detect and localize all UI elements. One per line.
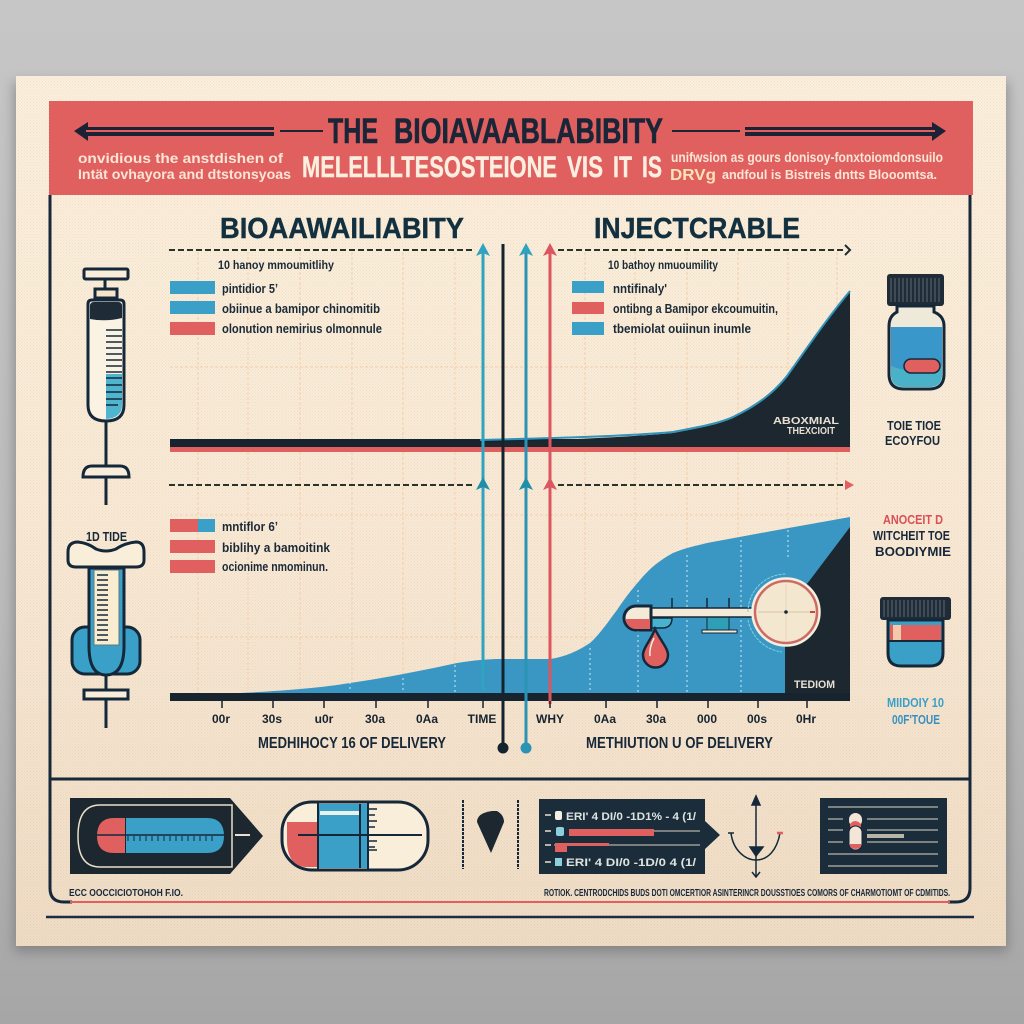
icon: open capsule bbox=[282, 802, 428, 870]
label: 1D TIDE bbox=[86, 529, 127, 544]
chart: upper injectable curve bbox=[170, 291, 850, 452]
axis ticks and labels: 30a bbox=[365, 712, 385, 726]
axis ticks and labels: WHY bbox=[536, 712, 564, 726]
legend: upper right: nntifinaly' bbox=[613, 281, 667, 296]
icon: drop marker bbox=[477, 811, 504, 853]
teal arrow 1 bbox=[476, 243, 490, 690]
axis ticks and labels: 00r bbox=[212, 712, 230, 726]
axis ticks and labels: 00s bbox=[747, 712, 767, 726]
title line 2: MELELLLTESOSTEIONE bbox=[302, 151, 557, 184]
icon: tagged capsule bbox=[70, 798, 263, 874]
divider dotted lines bbox=[463, 800, 518, 869]
chart label: TEDIOM bbox=[794, 679, 835, 691]
axis ticks and labels: 30s bbox=[262, 712, 282, 726]
title line 1 bbox=[328, 112, 663, 151]
title line 1: BIOIAVAABLABIBITY bbox=[394, 112, 663, 151]
legend: upper right bbox=[572, 258, 778, 336]
icon: lower jar bbox=[880, 597, 951, 666]
panel: dark pill card bbox=[820, 798, 947, 874]
title line 2: VIS bbox=[567, 151, 603, 184]
header banner bbox=[49, 101, 973, 195]
panel: data tag: ERI' 4 DI/0 -1D/0 4 (1/ bbox=[566, 857, 696, 869]
header right text: unifwsion as gours donisoy-fonxtoiomdonsuilo bbox=[671, 149, 943, 165]
title line 2: IT bbox=[613, 151, 632, 184]
lower right caption: BOODIYMIE bbox=[875, 544, 951, 559]
jar caption: MIIDOIY 10 bbox=[887, 695, 944, 710]
header left text: Intät ovhayora and dtstonsyoas bbox=[78, 166, 291, 182]
left header arrow bbox=[74, 122, 323, 141]
footnote left: ECC OOCCICIOTOHOH F.IO. bbox=[69, 888, 183, 899]
icon: upper vial bbox=[887, 274, 944, 389]
chart label bbox=[773, 416, 839, 437]
chart label: ABOXMIAL bbox=[773, 416, 839, 427]
vial caption: TOIE TIOE bbox=[887, 418, 941, 433]
axis ticks and labels: 0Hr bbox=[796, 712, 816, 726]
icon: arc with arrows bbox=[728, 796, 783, 877]
legend: lower left bbox=[170, 519, 331, 574]
legend: upper left: 10 hanoy mmoumitlihy bbox=[218, 258, 334, 272]
legend: upper right: tbemiolat ouiinun inumle bbox=[613, 321, 751, 336]
panel: data tag: ERI' 4 DI/0 -1D1% - 4 (1/ bbox=[566, 811, 696, 823]
axis ticks and labels: 0Aa bbox=[594, 712, 616, 726]
vial caption: ECOYFOU bbox=[885, 433, 940, 448]
axis title right: METHIUTION U OF DELIVERY bbox=[586, 735, 773, 752]
axis ticks and labels: 000 bbox=[697, 712, 717, 726]
panel: data tag bbox=[539, 799, 720, 874]
header right text: andfoul is Bistreis dntts Blooomtsa. bbox=[722, 167, 937, 182]
thermometer gauge bbox=[624, 574, 820, 668]
vial caption bbox=[885, 418, 941, 448]
header left text bbox=[78, 150, 291, 182]
axis ticks and labels bbox=[212, 701, 816, 726]
lower right caption bbox=[873, 512, 951, 559]
jar caption: 00F'TOUE bbox=[892, 712, 940, 727]
chart: lower delivery curve bbox=[170, 517, 850, 701]
legend: lower left: mntiflor 6ʼ bbox=[222, 519, 278, 534]
lower right caption: ANOCEIT D bbox=[883, 512, 943, 527]
teal arrow 2 bbox=[519, 243, 533, 754]
icon: lower syringe bbox=[68, 529, 144, 728]
header left text: onvidious the anstdishen of bbox=[78, 150, 283, 166]
icon: upper syringe bbox=[83, 269, 129, 505]
axis title left: MEDHIHOCY 16 OF DELIVERY bbox=[258, 735, 446, 752]
title line 2: IS bbox=[642, 151, 662, 184]
axis ticks and labels: 0Aa bbox=[416, 712, 438, 726]
heading: bioavailability: BIOAAWAILIABITY bbox=[220, 213, 464, 245]
right header arrow bbox=[672, 122, 946, 141]
red arrow bbox=[543, 243, 557, 704]
axis ticks and labels: 30a bbox=[646, 712, 666, 726]
legend: lower left: biblihy a bamoitink bbox=[222, 540, 331, 555]
lower right caption: WITCHEIT TOE bbox=[873, 528, 950, 543]
title line 1: THE bbox=[328, 112, 378, 151]
legend: lower left: ocionime nmominun. bbox=[222, 559, 328, 574]
legend: upper left: olonution nemirius olmonnule bbox=[222, 321, 382, 336]
heading: injectable: INJECTCRABLE bbox=[594, 213, 800, 245]
axis ticks and labels: u0r bbox=[315, 712, 334, 726]
chart label: THEXCIOIT bbox=[787, 426, 835, 437]
inner frame bbox=[50, 195, 970, 902]
jar caption bbox=[887, 695, 944, 727]
header right text: DRVg bbox=[670, 167, 716, 184]
legend: upper left bbox=[170, 258, 382, 336]
legend: upper left: pintidior 5ʼ bbox=[222, 281, 278, 296]
vertical arrows bbox=[476, 243, 557, 754]
axis ticks and labels: TIME bbox=[468, 712, 496, 726]
legend: upper right: ontibng a Bamipor ekcoumuitin, bbox=[613, 301, 778, 316]
dark axis line bbox=[498, 244, 508, 754]
top dashed axes bbox=[169, 250, 845, 485]
header right text bbox=[670, 149, 943, 184]
legend: upper left: obiinue a bamipor chinomitib bbox=[222, 301, 380, 316]
legend: upper right: 10 bathoy nmuoumility bbox=[608, 258, 718, 272]
